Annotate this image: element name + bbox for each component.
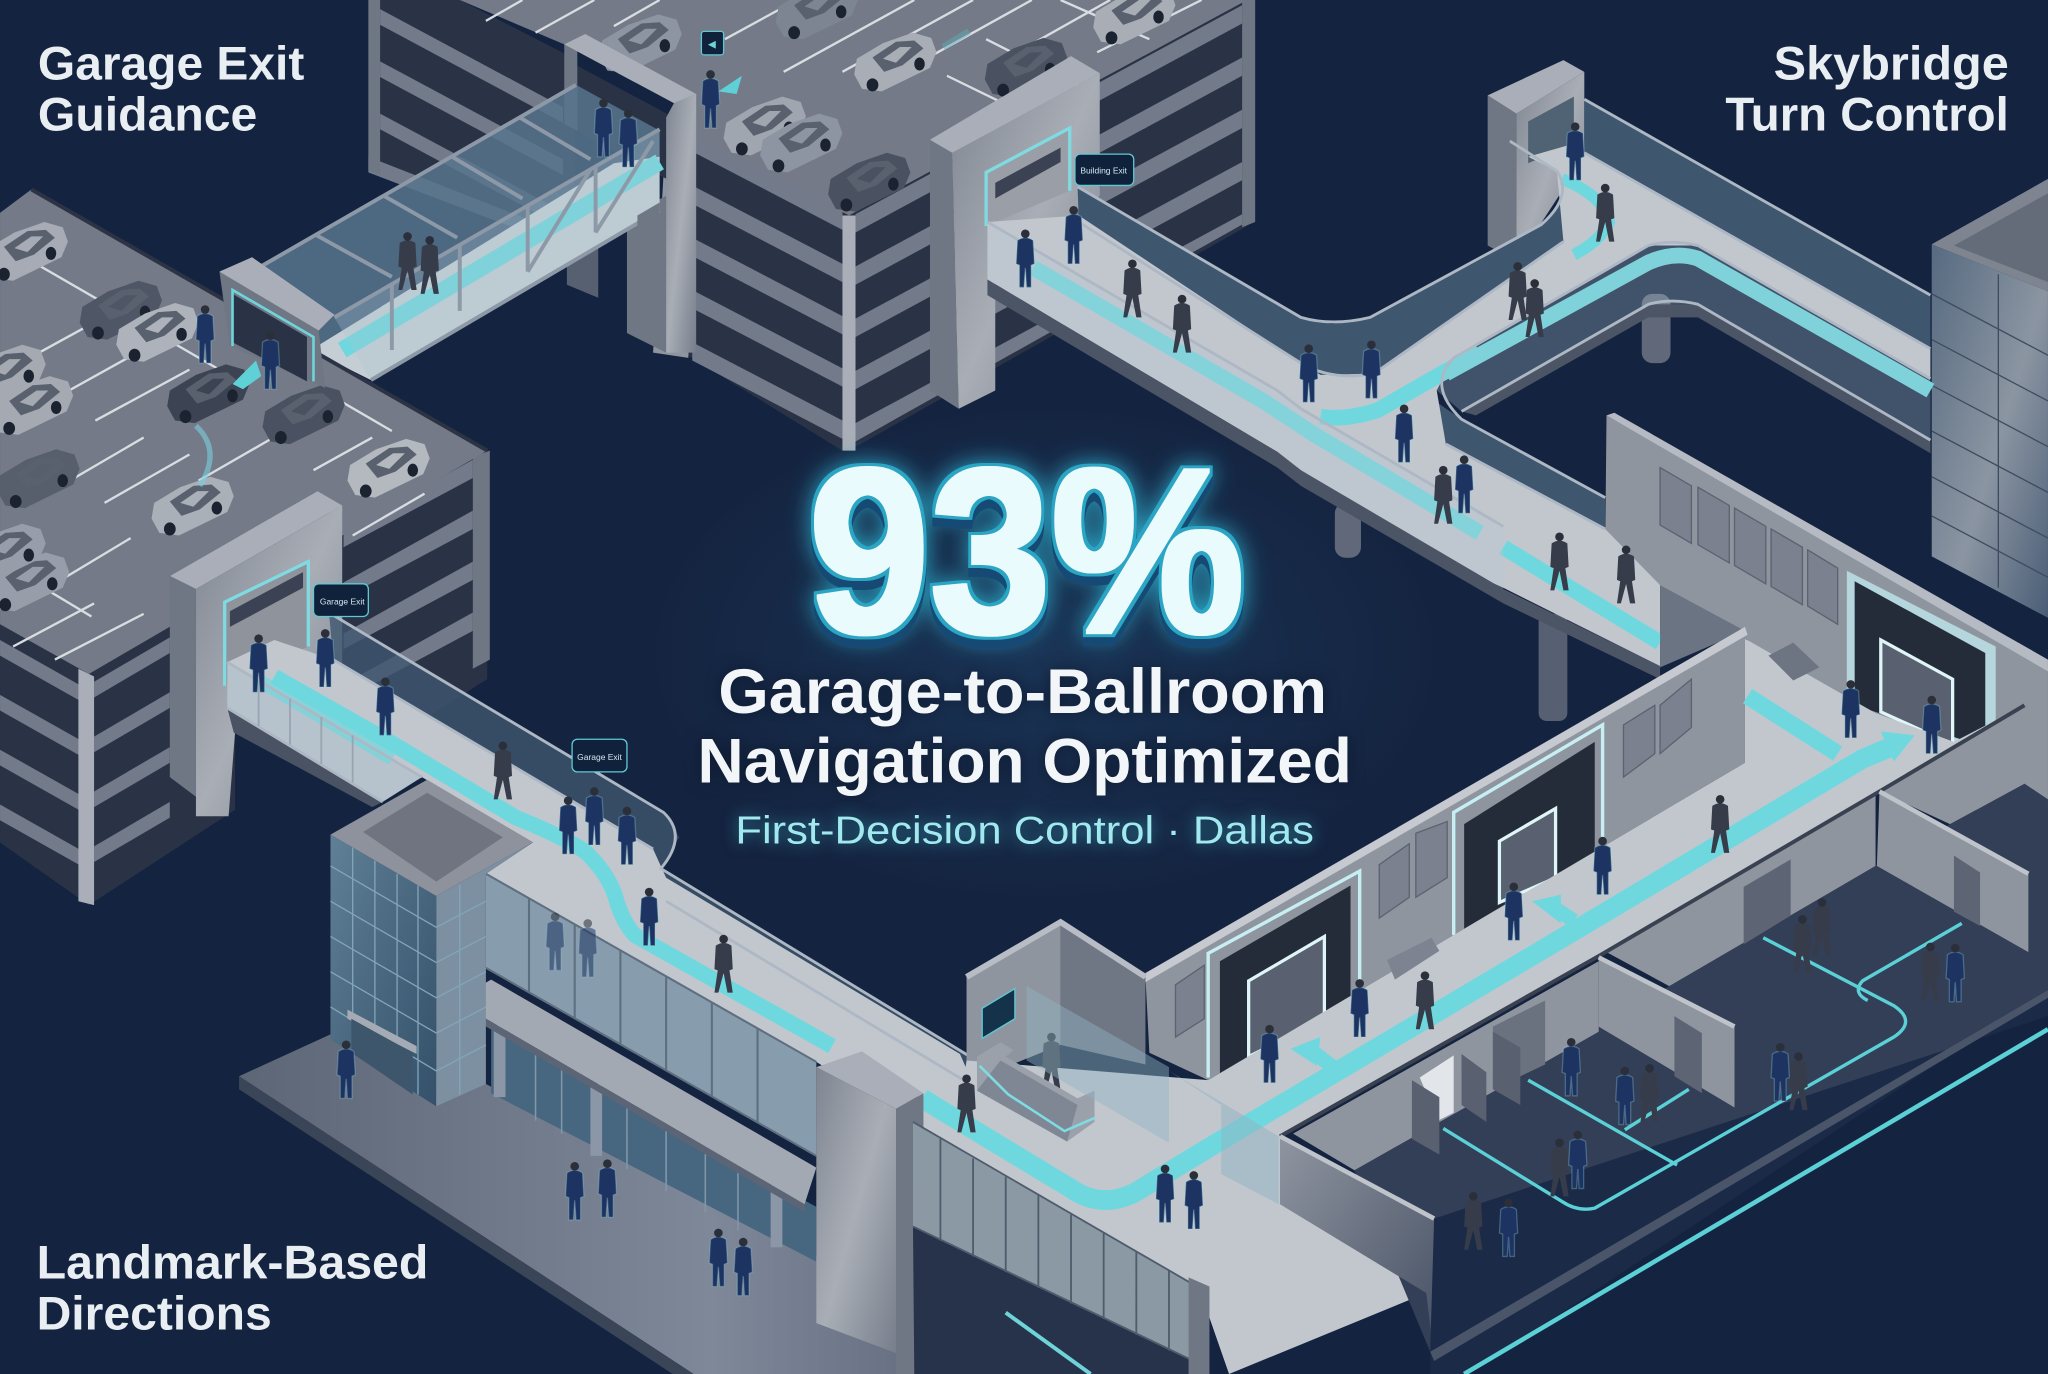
subtitle: first-decision control dallas: First-Decision Control · Dallas	[735, 810, 1314, 853]
people: plaza	[337, 1041, 752, 1296]
panel: corridor floor and cyan route	[913, 639, 2024, 1374]
callout: tower sign	[1075, 154, 1134, 185]
panel: column tower	[816, 1051, 923, 1374]
people: corridor and ballroom	[957, 680, 1964, 1256]
panel: tower two	[930, 56, 1100, 409]
panel: corridor wall with doors	[1145, 627, 1748, 1080]
title: garage-to-ballroom navigation optimized: Navigation Optimized	[697, 726, 1352, 796]
panel: skybridge entry arch	[196, 257, 334, 389]
panel: ballroom door end	[1847, 571, 1996, 751]
callout: tower sign: Building Exit	[1080, 166, 1128, 176]
icon: top direction sign	[701, 31, 724, 55]
panel: glass elevator tower	[330, 780, 533, 1106]
panel: rear wall	[1605, 413, 2048, 810]
heading: skybridge turn control: Turn Control	[1725, 88, 2009, 141]
cars: left garage roof	[0, 222, 430, 611]
center glow	[627, 392, 1463, 914]
panel: top parking garage	[368, 0, 1255, 451]
people: upper walkway	[1016, 122, 1635, 603]
callout: garage exit sign	[313, 584, 368, 616]
panel: reception back wall	[967, 922, 1145, 1083]
panel: glass skybridge one	[259, 85, 660, 380]
heading: garage exit guidance: Guidance	[38, 88, 257, 141]
panel: reception desk	[977, 986, 1279, 1204]
heading: garage exit guidance: Garage Exit	[38, 37, 305, 90]
heading: landmark-based directions: Landmark-Based	[37, 1236, 428, 1289]
panel: right building	[1932, 179, 2048, 618]
panel: lower left building plaza	[239, 1034, 914, 1374]
cars: top garage roof	[600, 0, 1176, 212]
title: garage-to-ballroom navigation optimized: Garage-to-Ballroom	[718, 657, 1327, 727]
icon: top direction sign: ◄	[705, 36, 718, 51]
panel: lower left walkway	[227, 614, 974, 1097]
panel: turn tower	[1488, 60, 1584, 261]
arrow: parking guidance path	[196, 426, 210, 486]
panel: upper walkway supports	[1335, 294, 1671, 721]
panel: upper walkway with branches	[987, 99, 1930, 679]
heading: skybridge turn control: Skybridge	[1774, 37, 2009, 90]
panel: mezzanine glass and entrance	[455, 874, 816, 1262]
people: lower left walkway	[249, 629, 733, 993]
callout: garage exit sign: Garage Exit	[320, 597, 365, 607]
big number: 93%: 93%	[808, 419, 1245, 682]
callout: walkway sign	[572, 739, 627, 772]
panel: garage tower with door	[170, 491, 342, 816]
callout: walkway sign: Garage Exit	[577, 752, 623, 762]
panel: glass rail lobby	[913, 1122, 1209, 1374]
panel: connector tower top	[564, 34, 696, 358]
top guide person	[701, 70, 742, 128]
heading: landmark-based directions: Directions	[37, 1287, 272, 1340]
panel: left parking garage	[0, 189, 490, 905]
panel: ballroom carpet rooms	[1280, 705, 2048, 1374]
